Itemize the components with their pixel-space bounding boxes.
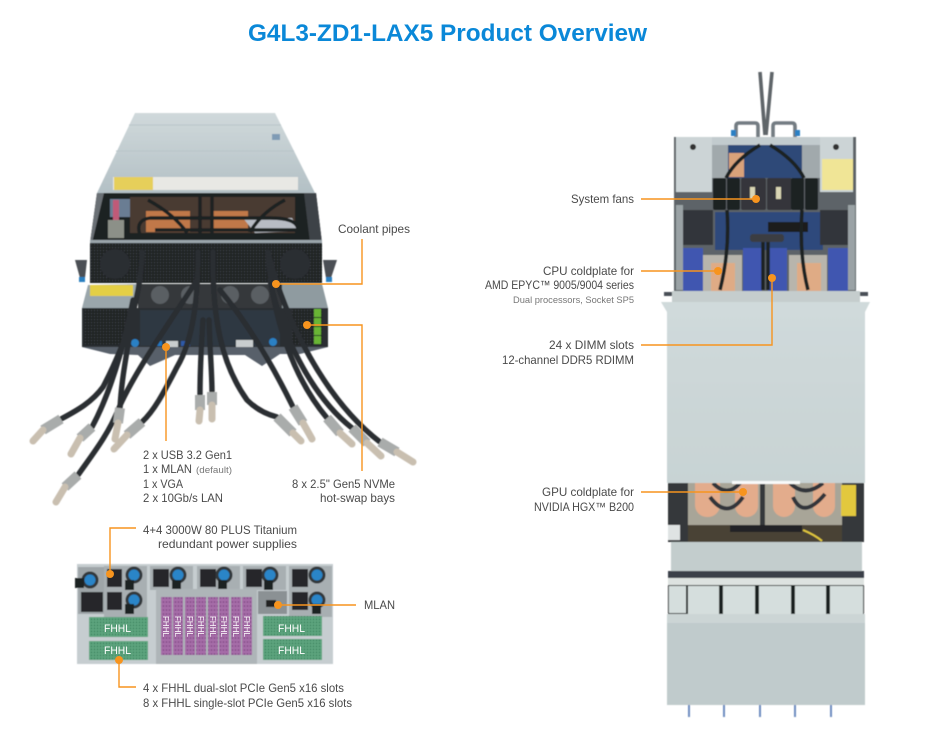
- callout: GPU coldplate: GPU coldplate for: [542, 485, 634, 499]
- callout: PCIe slots: 4 x FHHL dual-slot PCIe Gen5 x16 slots: [143, 681, 344, 695]
- system fans: [713, 178, 818, 210]
- callout: DIMM slots: 12-channel DDR5 RDIMM: [502, 353, 634, 367]
- front cover: [667, 614, 865, 705]
- callout: power supplies: 4+4 3000W 80 PLUS Titanium: [143, 523, 297, 537]
- FHHL slot labels: FHHL: [208, 616, 217, 638]
- callout: NVMe bays: 8 x 2.5" Gen5 NVMe: [292, 477, 395, 491]
- callout: coolant pipes: [272, 222, 410, 288]
- callout: PCIe slots: [115, 656, 352, 710]
- chassis top cover: [97, 113, 315, 193]
- callout: coolant pipes: Coolant pipes: [338, 222, 410, 236]
- callout: DIMM slots: 24 x DIMM slots: [549, 338, 634, 352]
- open bay: [674, 137, 856, 292]
- callout: MLAN: [274, 598, 395, 612]
- coolant cables: [61, 252, 380, 475]
- FHHL slot labels: FHHL: [104, 623, 131, 635]
- airflow shroud: [668, 542, 864, 585]
- FHHL slot labels: FHHL: [161, 616, 170, 638]
- callout: power supplies: redundant power supplies: [158, 537, 297, 551]
- FHHL slot labels: FHHL: [185, 616, 194, 638]
- FHHL slot labels: FHHL: [278, 645, 305, 657]
- FHHL slot labels: FHHL: [219, 616, 228, 638]
- callout: front I/O: 1 x VGA: [143, 477, 183, 491]
- front fan modules: [668, 585, 864, 615]
- callout: NVMe bays: [292, 321, 395, 505]
- callout: front I/O: 2 x 10Gb/s LAN: [143, 491, 223, 505]
- callout: MLAN: MLAN: [364, 598, 395, 612]
- power supply units: [75, 566, 332, 617]
- FHHL slot labels: FHHL: [196, 616, 205, 638]
- FHHL slot labels: FHHL: [231, 616, 240, 638]
- callout: system fans: System fans: [571, 192, 634, 206]
- callout: DIMM slots: [502, 274, 776, 367]
- GPU bay: [668, 470, 864, 542]
- callout: GPU coldplate: [534, 485, 747, 514]
- coolant connectors: [33, 392, 413, 502]
- CPU coldplates: [703, 255, 827, 291]
- cover edge highlight: [732, 481, 800, 484]
- internal coolant tubes: [720, 145, 808, 290]
- server front view with coolant pipes: [33, 113, 413, 502]
- FHHL slot labels: FHHL: [173, 616, 182, 638]
- callout: GPU coldplate: NVIDIA HGX™ B200: [534, 500, 634, 514]
- callout: front I/O: 2 x USB 3.2 Gen1: [143, 448, 232, 462]
- FHHL slot labels: FHHL: [278, 623, 305, 635]
- callout: system fans: [571, 192, 760, 206]
- callout: front I/O: 1 x MLAN: [143, 462, 192, 476]
- FHHL slot labels: [104, 616, 305, 657]
- side handles: [75, 260, 337, 282]
- main cover: [661, 302, 870, 483]
- FHHL slot labels: FHHL: [104, 645, 131, 657]
- callout: front I/O: [143, 343, 232, 505]
- rear cables and handles: [731, 72, 800, 137]
- callout: power supplies: [106, 523, 297, 578]
- lower chassis: [82, 284, 328, 366]
- callout: front I/O: (default): [196, 465, 232, 476]
- callout: CPU coldplate: [485, 264, 722, 306]
- open compute tray: [90, 193, 322, 244]
- rear I/O and PCIe panel: [75, 564, 333, 664]
- callout: CPU coldplate: Dual processors, Socket SP5: [513, 295, 634, 306]
- callout: NVMe bays: hot-swap bays: [320, 491, 395, 505]
- title: G4L3-ZD1-LAX5 Product Overview: [248, 20, 647, 47]
- front pins: [688, 705, 832, 717]
- panel base: [77, 564, 333, 664]
- callout: PCIe slots: 8 x FHHL single-slot PCIe Gen5 x16 slots: [143, 696, 352, 710]
- callout: CPU coldplate: AMD EPYC™ 9005/9004 series: [485, 278, 634, 292]
- MLAN port block: [258, 591, 287, 614]
- front lid bar: [664, 291, 868, 302]
- server top-down view: [661, 72, 870, 717]
- DIMM slots: [683, 248, 848, 291]
- fan mesh panel: [90, 243, 322, 283]
- callout: CPU coldplate: CPU coldplate for: [543, 264, 634, 278]
- purple single-slot PCIe bays: [156, 589, 257, 664]
- FHHL slot labels: FHHL: [242, 616, 251, 638]
- green dual-slot PCIe bays: [89, 616, 322, 660]
